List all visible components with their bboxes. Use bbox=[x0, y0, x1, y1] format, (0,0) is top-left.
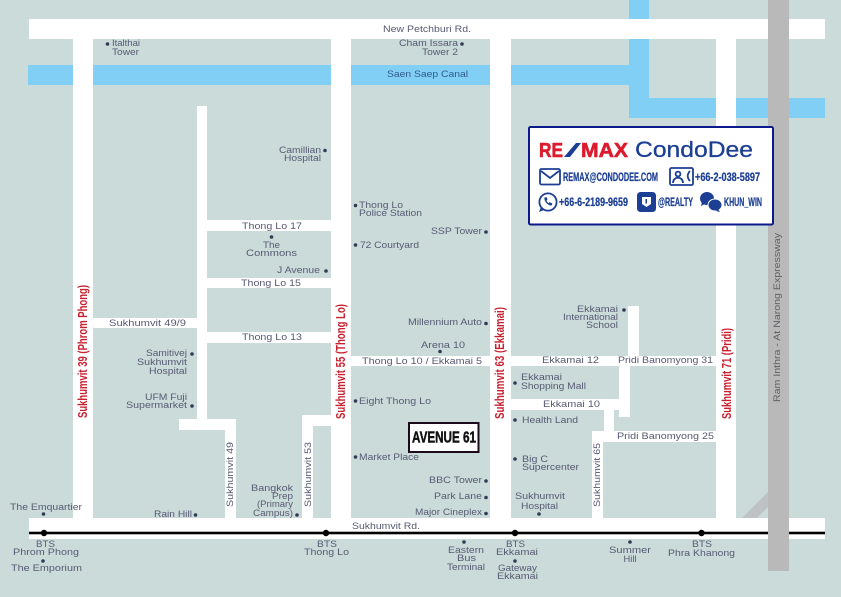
place: Eastern Bus Terminal: Eastern bbox=[448, 545, 484, 556]
place: Italthai Tower: Italthai bbox=[112, 38, 140, 49]
place: Ekkamai Shopping Mall: Shopping Mall bbox=[521, 381, 586, 392]
callout: Avenue 61 project marker bbox=[409, 423, 478, 452]
place: 72 Courtyard: 72 Courtyard bbox=[360, 240, 419, 251]
place: Major Cineplex: Major Cineplex bbox=[415, 507, 482, 518]
callout: Avenue 61 project marker: AVENUE 61 bbox=[412, 430, 476, 446]
place: Cham Issara Tower 2 bbox=[399, 38, 464, 58]
place: Bangkok Prep: Campus) bbox=[253, 508, 293, 519]
place: Ekkamai International School: International bbox=[563, 312, 618, 323]
place: UFM Fuji Supermarket: UFM Fuji bbox=[145, 392, 187, 403]
place: Sukhumvit Hospital bbox=[515, 491, 565, 516]
station: BTS Phrom Phong and The Emporium: BTS bbox=[36, 539, 55, 550]
station: BTS Ekkamai and Gateway Ekkamai bbox=[496, 539, 538, 582]
WeChat handle: KHUN_WIN bbox=[724, 195, 762, 209]
Saen Saep Canal waterway bbox=[28, 0, 825, 118]
place: Camillian Hospital bbox=[279, 145, 327, 164]
place: Samitivej Sukhumvit Hospital: Samitivej bbox=[146, 348, 187, 359]
road label: Sukhumvit 49/9: Sukhumvit 49/9 bbox=[109, 318, 186, 329]
email address: REMAX@CONDODEE.COM bbox=[563, 170, 658, 184]
place: Eastern Bus Terminal: Terminal bbox=[447, 562, 485, 573]
place: Italthai Tower: Tower bbox=[112, 47, 140, 58]
place: Summer Hill: Summer bbox=[609, 545, 652, 556]
place: Cham Issara Tower 2: Cham Issara bbox=[399, 38, 459, 49]
place: Samitivej Sukhumvit Hospital: Sukhumvit bbox=[137, 357, 187, 368]
icon: LINE bbox=[637, 192, 656, 212]
road label: Sukhumvit 55: Sukhumvit 55 (Thong Lo) bbox=[334, 304, 348, 419]
station: BTS Phra Khanong: BTS bbox=[692, 539, 712, 550]
place: SSP Tower: SSP Tower bbox=[431, 226, 483, 237]
place: The Emquartier: The Emquartier bbox=[10, 502, 83, 513]
road label: Sukhumvit 49: Sukhumvit 49 bbox=[225, 442, 236, 507]
station: BTS Phrom Phong and The Emporium: Phrom Phong bbox=[13, 547, 79, 558]
road label: Thong Lo 15: Thong Lo 15 bbox=[241, 278, 301, 289]
station: BTS Thong Lo: Thong Lo bbox=[304, 547, 349, 558]
place: Park Lane: Park Lane bbox=[434, 491, 482, 502]
place: Camillian Hospital: Camillian bbox=[279, 145, 321, 156]
logo: RE/MAX CondoDee bbox=[539, 137, 753, 162]
road label: Sukhumvit 71: Sukhumvit 71 (Pridi) bbox=[720, 328, 734, 419]
place: Cham Issara Tower 2: Tower 2 bbox=[422, 47, 458, 58]
place: Ekkamai International School bbox=[563, 304, 626, 331]
place: Summer Hill: Hill bbox=[624, 554, 636, 565]
place: The Commons bbox=[246, 235, 297, 259]
place: Big C Supercenter bbox=[513, 454, 580, 473]
station: BTS Phra Khanong bbox=[668, 539, 735, 559]
place: Ekkamai International School: School bbox=[586, 320, 618, 331]
station: BTS Thong Lo: BTS bbox=[317, 539, 337, 550]
place: Rain Hill: Rain Hill bbox=[154, 509, 192, 520]
place: Summer Hill bbox=[609, 540, 652, 565]
place: Ekkamai Shopping Mall bbox=[513, 372, 586, 392]
place: Camillian Hospital: Hospital bbox=[284, 153, 321, 164]
place: BBC Tower: BBC Tower bbox=[429, 475, 483, 486]
road label: Ekkamai 10: Ekkamai 10 bbox=[543, 399, 600, 410]
label: expressway name: Ram Inthra - At Narong Expressway bbox=[772, 233, 783, 402]
place: Health Land: Health Land bbox=[522, 415, 578, 426]
mobile phone number: +66-6-2189-9659 bbox=[559, 195, 628, 209]
place: Sukhumvit Hospital: Hospital bbox=[521, 501, 558, 512]
place: Thong Lo Police Station: Thong Lo bbox=[359, 200, 403, 211]
road label: Thong Lo 17: Thong Lo 17 bbox=[242, 221, 302, 232]
place: Eastern Bus Terminal bbox=[447, 540, 485, 573]
place: Market Place: Market Place bbox=[359, 452, 419, 463]
road label: Sukhumvit 39: Sukhumvit 39 (Phrom Phong) bbox=[76, 285, 90, 418]
road label: Pridi Banomyong 31: Pridi Banomyong 31 bbox=[618, 355, 713, 366]
place: Sukhumvit Hospital: Sukhumvit bbox=[515, 491, 565, 502]
place: Thong Lo Police Station: Police Station bbox=[359, 208, 422, 219]
place: Italthai Tower bbox=[106, 38, 140, 58]
station: BTS Phra Khanong: Phra Khanong bbox=[668, 548, 735, 559]
road label: Ekkamai 12: Ekkamai 12 bbox=[542, 355, 599, 366]
expressway ramp bbox=[742, 492, 768, 518]
road label: Sukhumvit 65: Sukhumvit 65 bbox=[592, 443, 603, 507]
road label: Pridi Banomyong 25: Pridi Banomyong 25 bbox=[617, 431, 714, 442]
station: BTS Phrom Phong and The Emporium: The Emporium bbox=[11, 563, 82, 574]
place: Samitivej Sukhumvit Hospital bbox=[137, 348, 194, 377]
station: BTS Ekkamai and Gateway Ekkamai: BTS bbox=[506, 539, 525, 550]
place: Bangkok Prep: Bangkok bbox=[251, 483, 293, 494]
place: Arena 10: Arena 10 bbox=[421, 340, 465, 351]
place: J Avenue: J Avenue bbox=[277, 265, 320, 276]
label: Saen Saep Canal: Saen Saep Canal bbox=[387, 69, 468, 80]
place: Ekkamai International School: Ekkamai bbox=[577, 304, 618, 315]
place: Eastern Bus Terminal: Bus bbox=[457, 553, 476, 564]
icon: email envelope bbox=[540, 169, 560, 184]
icon: contact card bbox=[670, 168, 693, 185]
road label: Sukhumvit 53: Sukhumvit 53 bbox=[303, 442, 314, 507]
place: Bangkok Prep: Prep bbox=[272, 491, 293, 502]
place: UFM Fuji Supermarket: Supermarket bbox=[126, 400, 187, 411]
LINE handle: @REALTY bbox=[658, 195, 693, 209]
place: Bangkok Prep: (Primary bbox=[257, 499, 293, 510]
place: Eight Thong Lo: Eight Thong Lo bbox=[359, 396, 431, 407]
place: Ekkamai Shopping Mall: Ekkamai bbox=[521, 372, 562, 383]
icon: WhatsApp phone bbox=[539, 193, 557, 212]
road label: Sukhumvit 63: Sukhumvit 63 (Ekkamai) bbox=[493, 307, 507, 419]
place: The Commons: Commons bbox=[246, 248, 297, 259]
label: Sukhumvit Rd.: Sukhumvit Rd. bbox=[352, 521, 420, 532]
label: New Petchburi Rd.: New Petchburi Rd. bbox=[383, 24, 471, 35]
logo: RE/MAX CondoDee: CondoDee bbox=[635, 137, 753, 162]
place: Big C Supercenter: Big C bbox=[522, 454, 548, 465]
icon: WeChat bubbles bbox=[700, 192, 722, 212]
place: Bangkok Prep bbox=[251, 483, 299, 519]
place: Millennium Auto: Millennium Auto bbox=[408, 317, 482, 328]
road label: Thong Lo 10 / Ekkamai 5: Thong Lo 10 / Ekkamai 5 bbox=[362, 356, 482, 367]
place: Big C Supercenter: Supercenter bbox=[522, 462, 580, 473]
logo: RE/MAX CondoDee: MAX bbox=[581, 140, 629, 162]
place: Thong Lo Police Station bbox=[354, 200, 422, 219]
logo: RE/MAX CondoDee: RE bbox=[539, 140, 563, 162]
place: The Commons: The bbox=[263, 240, 280, 251]
station: BTS Phrom Phong and The Emporium bbox=[11, 539, 82, 574]
place: UFM Fuji Supermarket bbox=[126, 392, 194, 411]
office phone number: +66-2-038-5897 bbox=[695, 170, 760, 184]
panel: RE/MAX CondoDee contact card bbox=[529, 127, 773, 224]
road label: Thong Lo 13: Thong Lo 13 bbox=[242, 332, 302, 343]
BTS line with stations bbox=[29, 530, 825, 536]
place: Samitivej Sukhumvit Hospital: Hospital bbox=[149, 366, 187, 377]
station: BTS Ekkamai and Gateway Ekkamai: Ekkamai bbox=[496, 547, 538, 558]
station: BTS Ekkamai and Gateway Ekkamai: Ekkamai bbox=[497, 571, 538, 582]
expressway bbox=[768, 0, 789, 571]
station: BTS Ekkamai and Gateway Ekkamai: Gateway bbox=[498, 563, 537, 574]
station: BTS Thong Lo bbox=[304, 539, 349, 558]
